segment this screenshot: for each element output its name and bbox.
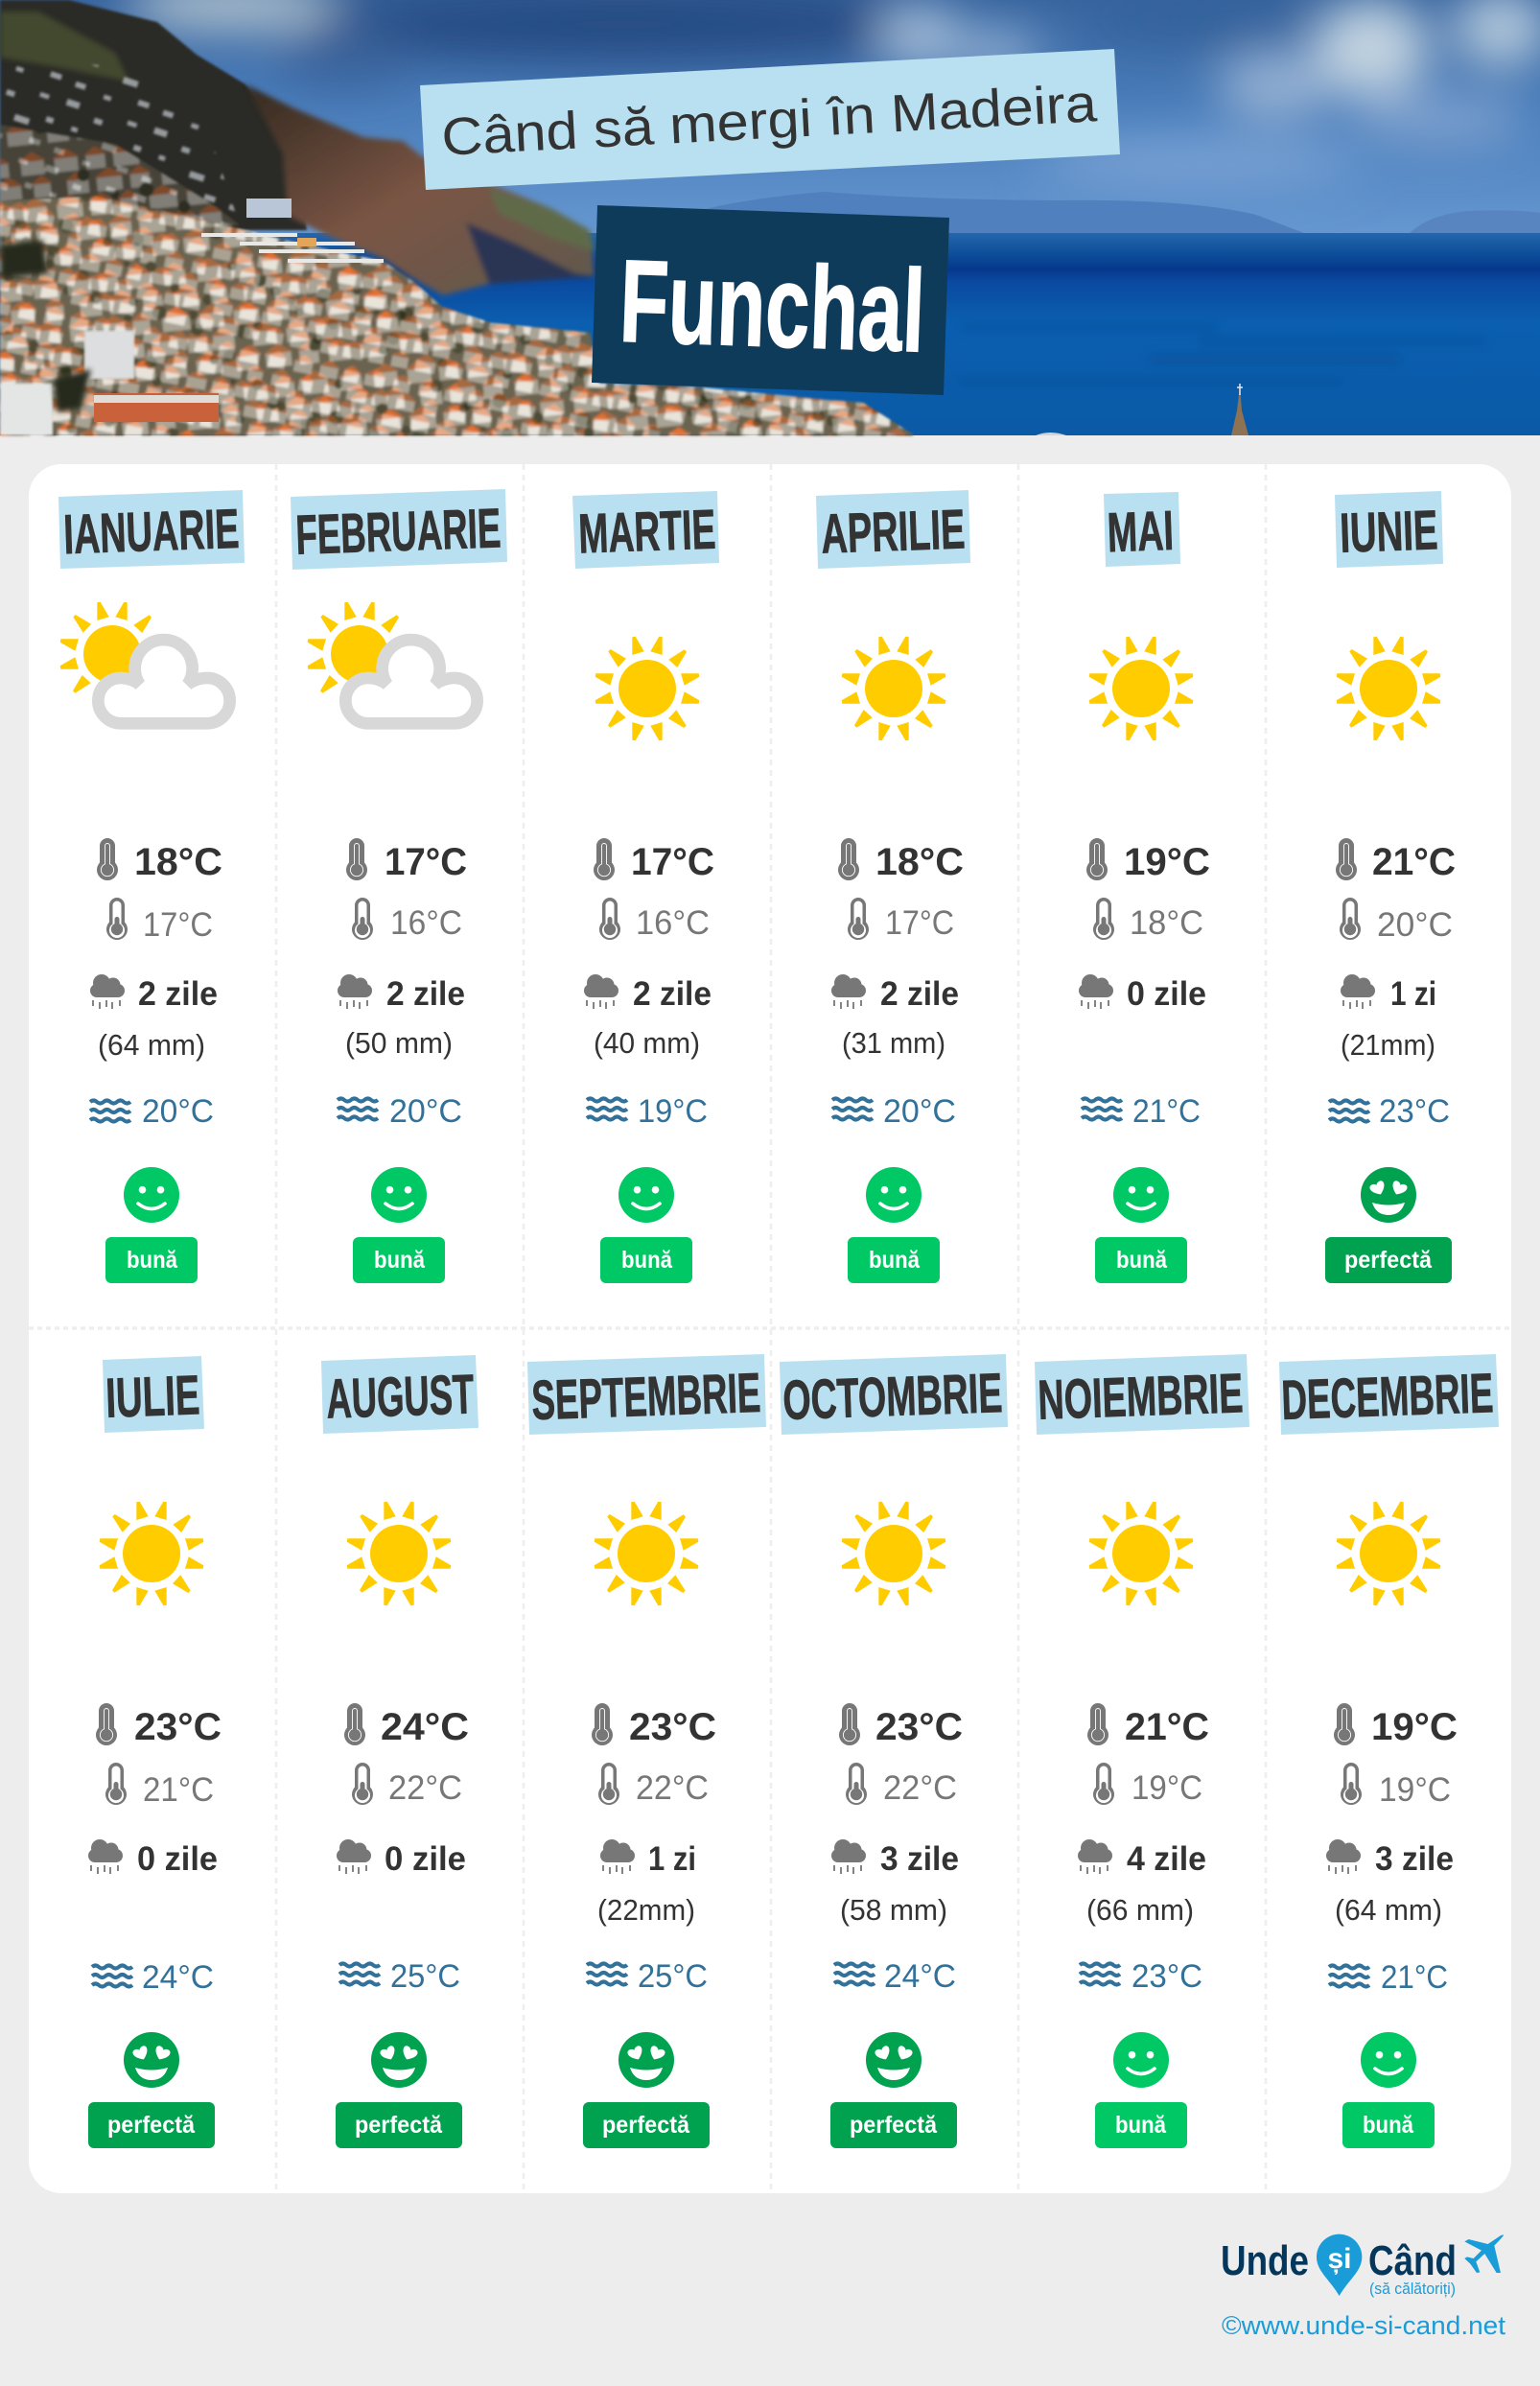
rainy days: 4 zile [1127,1840,1206,1878]
max air temperature: 21°C [1125,1706,1209,1748]
month: august [321,1355,478,2148]
icon: smiley [866,1167,922,1223]
month label [572,491,719,569]
max air temperature: 23°C [629,1706,716,1748]
rating badge [1095,1237,1187,1283]
min air temperature: 16°C [390,904,462,942]
rainfall: (50 mm) [345,1026,453,1060]
icon: location pin [1317,2234,1362,2296]
min air temperature: 19°C [1379,1771,1451,1809]
icon: sun [1337,637,1440,740]
sea temperature: 19°C [638,1093,708,1130]
month label [527,1354,766,1435]
rating badge: perfectă [1344,1247,1433,1274]
min air temperature [848,898,954,942]
icon: sun [842,1502,945,1605]
sea temperature: 24°C [142,1959,214,1996]
month: ianuarie [58,490,245,1283]
month: octombrie [780,1354,1008,2148]
month label: SEPTEMBRIE [530,1362,761,1432]
month label: FEBRUARIE [294,497,502,567]
heading: Funchal: Funchal [618,236,927,377]
min air temperature: 17°C [885,904,954,942]
sea temperature [587,1093,708,1130]
icon: sun [100,1502,203,1605]
sea temperature [834,1958,956,1995]
website credit: ©www.unde-si-cand.net [1222,2311,1506,2340]
rating badge [1342,2102,1435,2148]
sea temperature [339,1958,460,1995]
icon: smiley [371,1167,427,1223]
min air temperature [352,1763,462,1807]
rating badge [848,1237,940,1283]
rating badge [830,2102,957,2148]
rainfall: (31 mm) [842,1026,945,1060]
rainy days [584,974,712,1013]
min air temperature [1340,898,1453,944]
month: septembrie [527,1354,766,2148]
panel: monthly climate table [29,464,1511,2193]
max air temperature [1334,1703,1458,1748]
max air temperature [346,838,467,883]
max air temperature [1086,838,1210,883]
logo: Unde și Când: și [1327,2243,1352,2275]
sea temperature [1080,1958,1202,1995]
rainy days: 2 zile [880,975,959,1013]
hero photo: Funchal coast [0,0,1540,435]
rating badge: bună [1363,2112,1414,2139]
month label [321,1355,478,1434]
min air temperature: 16°C [636,904,710,942]
min air temperature: 18°C [1130,904,1203,942]
logo: Unde și Când [1221,2234,1504,2298]
max air temperature: 21°C [1372,841,1456,883]
month label [1035,1354,1249,1435]
month label [1335,491,1443,568]
month: mai [1079,492,1210,1283]
min air temperature: 22°C [636,1769,709,1807]
rainfall: (64 mm) [98,1028,205,1062]
month: februarie [291,489,507,1283]
rainfall: (64 mm) [1335,1893,1442,1927]
rating badge [336,2102,462,2148]
month label: MARTIE [577,499,716,565]
rainy days: 3 zile [1375,1840,1454,1878]
icon: sun [595,1502,698,1605]
title label: Când să mergi în Madeira: Când să mergi în Madeira [440,73,1099,167]
rainy days: 2 zile [386,975,465,1013]
rating badge: bună [127,1247,178,1274]
rainy days [338,974,465,1013]
sea temperature [1329,1959,1448,1996]
max air temperature: 19°C [1124,841,1210,883]
rating badge [1095,2102,1187,2148]
rainy days: 0 zile [385,1840,466,1878]
min air temperature: 22°C [883,1769,957,1807]
max air temperature: 24°C [381,1706,469,1748]
icon: heart-eyes smiley [371,2032,427,2088]
rating badge: perfectă [850,2112,938,2139]
icon: sun [1337,1502,1440,1605]
icon: sun behind cloud [60,602,230,723]
min air temperature [599,898,710,942]
sea temperature [1082,1093,1201,1130]
min air temperature: 17°C [143,906,213,944]
month label: IUNIE [1339,499,1438,565]
sea temperature: 20°C [883,1093,956,1130]
icon: smiley [124,1167,179,1223]
heading: Funchal [592,205,949,395]
max air temperature [592,1703,716,1748]
sea temperature: 23°C [1379,1093,1450,1130]
month: iunie [1325,491,1456,1283]
max air temperature [97,838,222,883]
icon: sun behind cloud [308,602,478,723]
sea temperature: 20°C [142,1093,214,1130]
rainy days: 0 zile [137,1840,218,1878]
max air temperature: 18°C [134,841,222,883]
rainy days: 2 zile [633,975,712,1013]
sea temperature [1329,1093,1450,1130]
title label: Când să mergi în Madeira [420,49,1120,190]
rating badge: bună [374,1247,426,1274]
rainfall: (21mm) [1341,1028,1435,1062]
month label [1104,492,1180,567]
icon: sun [1089,637,1193,740]
min air temperature [1093,898,1203,942]
rainy days: 1 zi [648,1840,696,1878]
max air temperature [838,838,964,883]
rating badge [583,2102,710,2148]
month: aprilie [816,490,970,1283]
rainy days [1326,1839,1454,1878]
month label: MAI [1107,500,1175,564]
icon: sun [1089,1502,1193,1605]
rainy days [831,974,959,1013]
icon: heart-eyes smiley [866,2032,922,2088]
month label [816,490,970,569]
sea temperature: 24°C [884,1958,956,1995]
rainy days [600,1839,696,1878]
max air temperature: 23°C [134,1706,222,1748]
sea temperature [92,1959,214,1996]
max air temperature [344,1703,469,1748]
max air temperature [96,1703,222,1748]
min air temperature [106,898,213,944]
rainy days [1341,974,1436,1013]
rating badge [353,1237,445,1283]
rainfall: (58 mm) [840,1893,947,1927]
rating badge: perfectă [107,2112,196,2139]
min air temperature [352,898,462,942]
min air temperature: 19°C [1132,1769,1202,1807]
rainy days [337,1839,466,1878]
rainfall: (22mm) [597,1893,695,1927]
rainy days [1078,1839,1206,1878]
month label: APRILIE [820,498,966,566]
rating badge [105,1237,198,1283]
icon: smiley [618,1167,674,1223]
max air temperature: 18°C [875,841,964,883]
max air temperature: 23°C [875,1706,963,1748]
icon: heart-eyes smiley [1361,1167,1416,1223]
min air temperature [1093,1763,1202,1807]
min air temperature: 21°C [143,1771,214,1809]
rating badge: bună [1115,2112,1167,2139]
logo: Unde și Când: Unde [1221,2237,1309,2284]
month label: AUGUST [325,1363,475,1431]
month label [58,490,245,569]
rainy days: 3 zile [880,1840,959,1878]
sea temperature: 21°C [1381,1959,1448,1996]
month: iulie [88,1356,222,2148]
rainy days: 0 zile [1127,975,1206,1013]
max air temperature: 19°C [1371,1706,1458,1748]
rainfall: (66 mm) [1086,1893,1194,1927]
rainy days [831,1839,959,1878]
icon: sun [842,637,945,740]
logo: Unde și Când: (să călătoriți) [1369,2280,1456,2298]
max air temperature [594,838,714,883]
icon: smiley [1361,2032,1416,2088]
month label: OCTOMBRIE [782,1362,1003,1432]
rainfall: (40 mm) [594,1026,700,1060]
icon: heart-eyes smiley [618,2032,674,2088]
rating badge: perfectă [355,2112,443,2139]
icon: sun [595,637,699,740]
icon: airplane [1464,2234,1504,2273]
sea temperature: 20°C [389,1093,462,1130]
rainy days: 2 zile [138,975,218,1013]
min air temperature [1341,1763,1451,1809]
rating badge: bună [621,1247,673,1274]
rating badge: bună [869,1247,921,1274]
sea temperature [90,1093,214,1130]
month: martie [572,491,719,1283]
min air temperature [598,1763,709,1807]
rainy days [1079,974,1206,1013]
sea temperature [832,1093,956,1130]
sea temperature [338,1093,462,1130]
rating badge: perfectă [602,2112,690,2139]
rainy days: 1 zi [1390,975,1436,1013]
month: decembrie [1279,1354,1499,2148]
sea temperature [587,1958,708,1995]
month label [103,1356,204,1433]
rating badge [88,2102,215,2148]
max air temperature: 17°C [385,841,467,883]
max air temperature [839,1703,963,1748]
sea temperature: 23°C [1132,1958,1202,1995]
month label: IULIE [105,1364,200,1430]
icon: smiley [1113,1167,1169,1223]
month label [291,489,507,570]
max air temperature [1087,1703,1209,1748]
rating badge: bună [1116,1247,1168,1274]
max air temperature: 17°C [631,841,714,883]
month: noiembrie [1035,1354,1249,2148]
rainy days [90,974,218,1013]
min air temperature [105,1763,214,1809]
logo: Unde și Când: Când [1368,2237,1457,2284]
rating badge [600,1237,692,1283]
month label: NOIEMBRIE [1037,1362,1244,1432]
min air temperature [846,1763,957,1807]
icon: sun [347,1502,451,1605]
sea temperature: 25°C [638,1958,708,1995]
min air temperature: 22°C [388,1769,462,1807]
rating badge [1325,1237,1452,1283]
icon: smiley [1113,2032,1169,2088]
rainy days [88,1839,218,1878]
month label [780,1354,1008,1435]
max air temperature [1336,838,1456,883]
sea temperature: 25°C [390,1958,460,1995]
min air temperature: 20°C [1377,906,1453,944]
month label: IANUARIE [62,498,240,566]
icon: heart-eyes smiley [124,2032,179,2088]
sea temperature: 21°C [1132,1093,1201,1130]
